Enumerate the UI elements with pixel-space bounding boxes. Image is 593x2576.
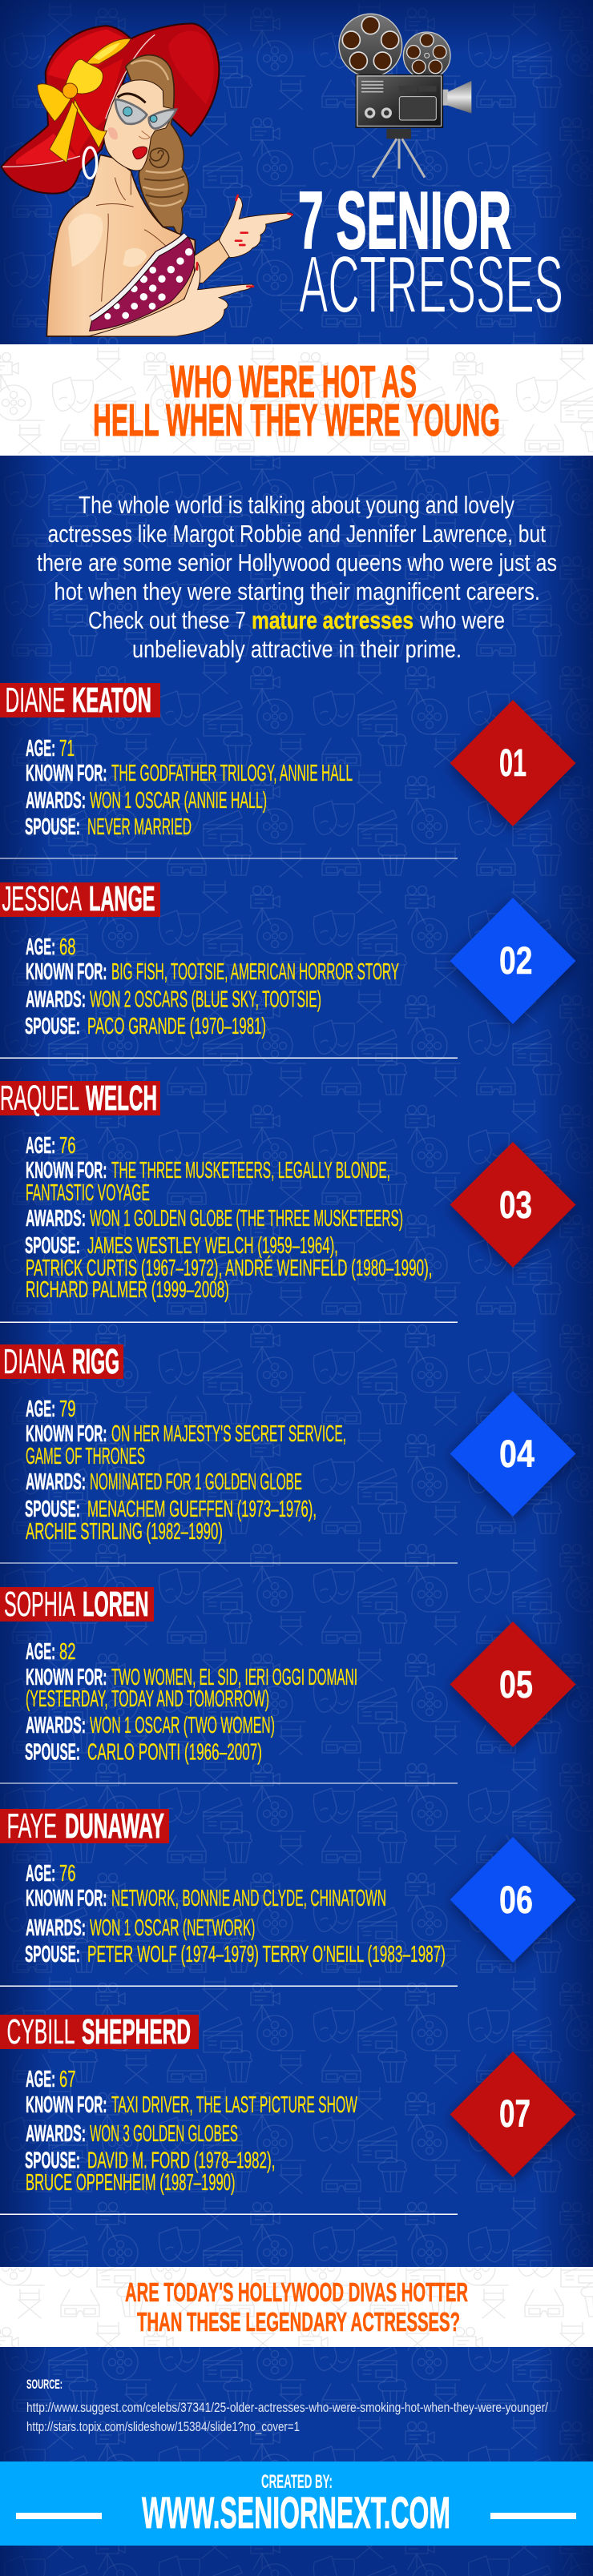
spouse: NEVER MARRIED <box>87 814 192 840</box>
known for: TWO WOMEN, EL SID, IERI OGGI DOMANI <box>111 1665 357 1690</box>
footer band: CREATED BY: <box>261 2471 333 2493</box>
intro paragraph: unbelievably attractive in their prime. <box>132 635 462 663</box>
title <box>298 176 563 330</box>
badge 05: 05 <box>499 1664 533 1706</box>
illustration: woman in red hat pointing <box>2 23 292 336</box>
name label <box>0 2012 199 2052</box>
known for: GAME OF THRONES <box>26 1444 145 1469</box>
known for <box>26 1421 346 1469</box>
known for <box>26 1665 357 1712</box>
awards: AWARDS: <box>26 788 86 814</box>
known for: KNOWN FOR: <box>26 2092 107 2118</box>
spouse <box>25 1942 446 1967</box>
footer band <box>0 2461 593 2546</box>
source list: SOURCE: <box>26 2377 63 2392</box>
badge 03 <box>450 1142 575 1268</box>
name label: LOREN <box>83 1585 149 1624</box>
spouse: SPOUSE: <box>25 1233 80 1259</box>
badge 02 <box>450 898 575 1024</box>
age: 76 <box>59 1861 75 1887</box>
known for <box>26 2092 357 2118</box>
awards <box>26 1915 255 1941</box>
badge 07 <box>450 2052 575 2177</box>
spouse: SPOUSE: <box>25 1014 80 1039</box>
awards: WON 1 OSCAR (TWO WOMEN) <box>90 1713 275 1738</box>
name label: KEATON <box>72 681 151 720</box>
known for: FANTASTIC VOYAGE <box>26 1180 150 1206</box>
awards <box>26 1713 275 1738</box>
name label <box>0 681 160 720</box>
age: AGE: <box>26 1639 55 1665</box>
age: AGE: <box>26 2067 55 2092</box>
awards: AWARDS: <box>26 1915 86 1941</box>
age: AGE: <box>26 934 55 960</box>
closing question band <box>0 2267 593 2347</box>
awards <box>26 1206 403 1232</box>
spouse <box>25 814 192 840</box>
known for <box>26 1158 390 1206</box>
spouse: ARCHIE STIRLING (1982–1990) <box>26 1519 223 1545</box>
panel: Cybill Shepherd <box>0 2012 575 2196</box>
awards <box>26 788 267 814</box>
awards: AWARDS: <box>26 1469 86 1495</box>
spouse: SPOUSE: <box>25 1942 80 1967</box>
badge 04: 04 <box>499 1433 535 1476</box>
spouse: RICHARD PALMER (1999–2008) <box>26 1277 229 1303</box>
panel: Raquel Welch <box>0 1079 575 1303</box>
name label: JESSICA <box>2 879 82 918</box>
badge 01 <box>450 700 575 826</box>
spouse: MENACHEM GUEFFEN (1973–1976), <box>87 1497 317 1522</box>
name label: SHEPHERD <box>82 2012 191 2052</box>
spouse <box>25 2148 276 2196</box>
subtitle band <box>0 344 593 456</box>
age: AGE: <box>26 1861 55 1887</box>
known for: KNOWN FOR: <box>26 761 107 786</box>
known for <box>26 1886 386 1911</box>
spouse: PACO GRANDE (1970–1981) <box>87 1014 266 1039</box>
known for <box>26 959 399 985</box>
age: AGE: <box>26 1133 55 1159</box>
panel: Diane Keaton <box>0 681 575 840</box>
spouse: BRUCE OPPENHEIM (1987–1990) <box>26 2170 236 2196</box>
spouse <box>25 1739 262 1765</box>
icon: film projector <box>339 14 471 178</box>
panel: Sophia Loren <box>0 1585 575 1765</box>
age: AGE: <box>26 1397 55 1422</box>
spouse: SPOUSE: <box>25 1497 80 1522</box>
known for: KNOWN FOR: <box>26 1158 107 1184</box>
badge 04 <box>450 1391 575 1517</box>
spouse: CARLO PONTI (1966–2007) <box>87 1739 262 1765</box>
awards: AWARDS: <box>26 1713 86 1738</box>
awards: WON 3 GOLDEN GLOBES <box>90 2121 238 2147</box>
age: 71 <box>59 736 75 762</box>
name label: CYBILL <box>6 2012 75 2052</box>
name label: WELCH <box>86 1079 157 1118</box>
badge 06: 06 <box>499 1879 533 1922</box>
badge 07: 07 <box>499 2093 530 2136</box>
name label <box>0 1806 169 1846</box>
age: 82 <box>59 1639 75 1665</box>
known for: TAXI DRIVER, THE LAST PICTURE SHOW <box>111 2092 357 2118</box>
badge 02: 02 <box>499 940 532 983</box>
age: 67 <box>59 2067 75 2092</box>
known for: (YESTERDAY, TODAY AND TOMORROW) <box>26 1686 269 1712</box>
intro paragraph: who were <box>419 606 505 634</box>
spouse: SPOUSE: <box>25 814 80 840</box>
name label: LANGE <box>89 879 155 918</box>
known for: KNOWN FOR: <box>26 1421 107 1447</box>
spouse <box>25 1233 433 1303</box>
spouse: DAVID M. FORD (1978–1982), <box>87 2148 276 2173</box>
spouse <box>25 1014 266 1039</box>
awards: WON 2 OSCARS (BLUE SKY, TOOTSIE) <box>90 987 321 1012</box>
name label: DIANA <box>3 1342 65 1381</box>
intro paragraph: Check out these 7 <box>88 606 246 634</box>
name label: SOPHIA <box>4 1585 75 1624</box>
known for: THE GODFATHER TRILOGY, ANNIE HALL <box>111 761 353 786</box>
badge 03: 03 <box>499 1184 532 1227</box>
age: AGE: <box>26 736 55 762</box>
intro paragraph: mature actresses <box>252 606 413 634</box>
age: 79 <box>59 1397 75 1422</box>
known for: KNOWN FOR: <box>26 1886 107 1911</box>
spouse <box>25 1497 317 1545</box>
awards: NOMINATED FOR 1 GOLDEN GLOBE <box>90 1469 302 1495</box>
known for: KNOWN FOR: <box>26 959 107 985</box>
name label: DUNAWAY <box>65 1806 164 1846</box>
intro paragraph <box>37 491 557 663</box>
source list: http://stars.topix.com/slideshow/15384/slide1?no_cover=1 <box>26 2419 300 2434</box>
source list <box>26 2377 548 2434</box>
awards: WON 1 OSCAR (ANNIE HALL) <box>90 788 267 814</box>
spouse: JAMES WESTLEY WELCH (1959–1964), <box>87 1233 338 1259</box>
spouse: SPOUSE: <box>25 2148 80 2173</box>
name label: RIGG <box>72 1342 119 1381</box>
badge 01: 01 <box>499 742 526 785</box>
awards: AWARDS: <box>26 987 86 1012</box>
awards <box>26 2121 238 2147</box>
age: 68 <box>59 934 75 960</box>
panel: Diana Rigg <box>0 1342 575 1545</box>
known for <box>26 761 353 786</box>
awards: AWARDS: <box>26 2121 86 2147</box>
awards: WON 1 OSCAR (NETWORK) <box>90 1915 255 1941</box>
known for: KNOWN FOR: <box>26 1665 107 1690</box>
panel: Jessica Lange <box>0 879 575 1039</box>
badge 05 <box>450 1622 575 1747</box>
awards: AWARDS: <box>26 1206 86 1232</box>
panel: Faye Dunaway <box>0 1806 575 1967</box>
name label: DIANE <box>5 681 66 720</box>
awards <box>26 1469 302 1495</box>
badge 06 <box>450 1837 575 1963</box>
age: 76 <box>59 1133 75 1159</box>
awards <box>26 987 321 1012</box>
name label: RAQUEL <box>0 1079 79 1118</box>
known for: ON HER MAJESTY'S SECRET SERVICE, <box>111 1421 346 1447</box>
name label: FAYE <box>6 1806 57 1846</box>
spouse: SPOUSE: <box>25 1739 80 1765</box>
